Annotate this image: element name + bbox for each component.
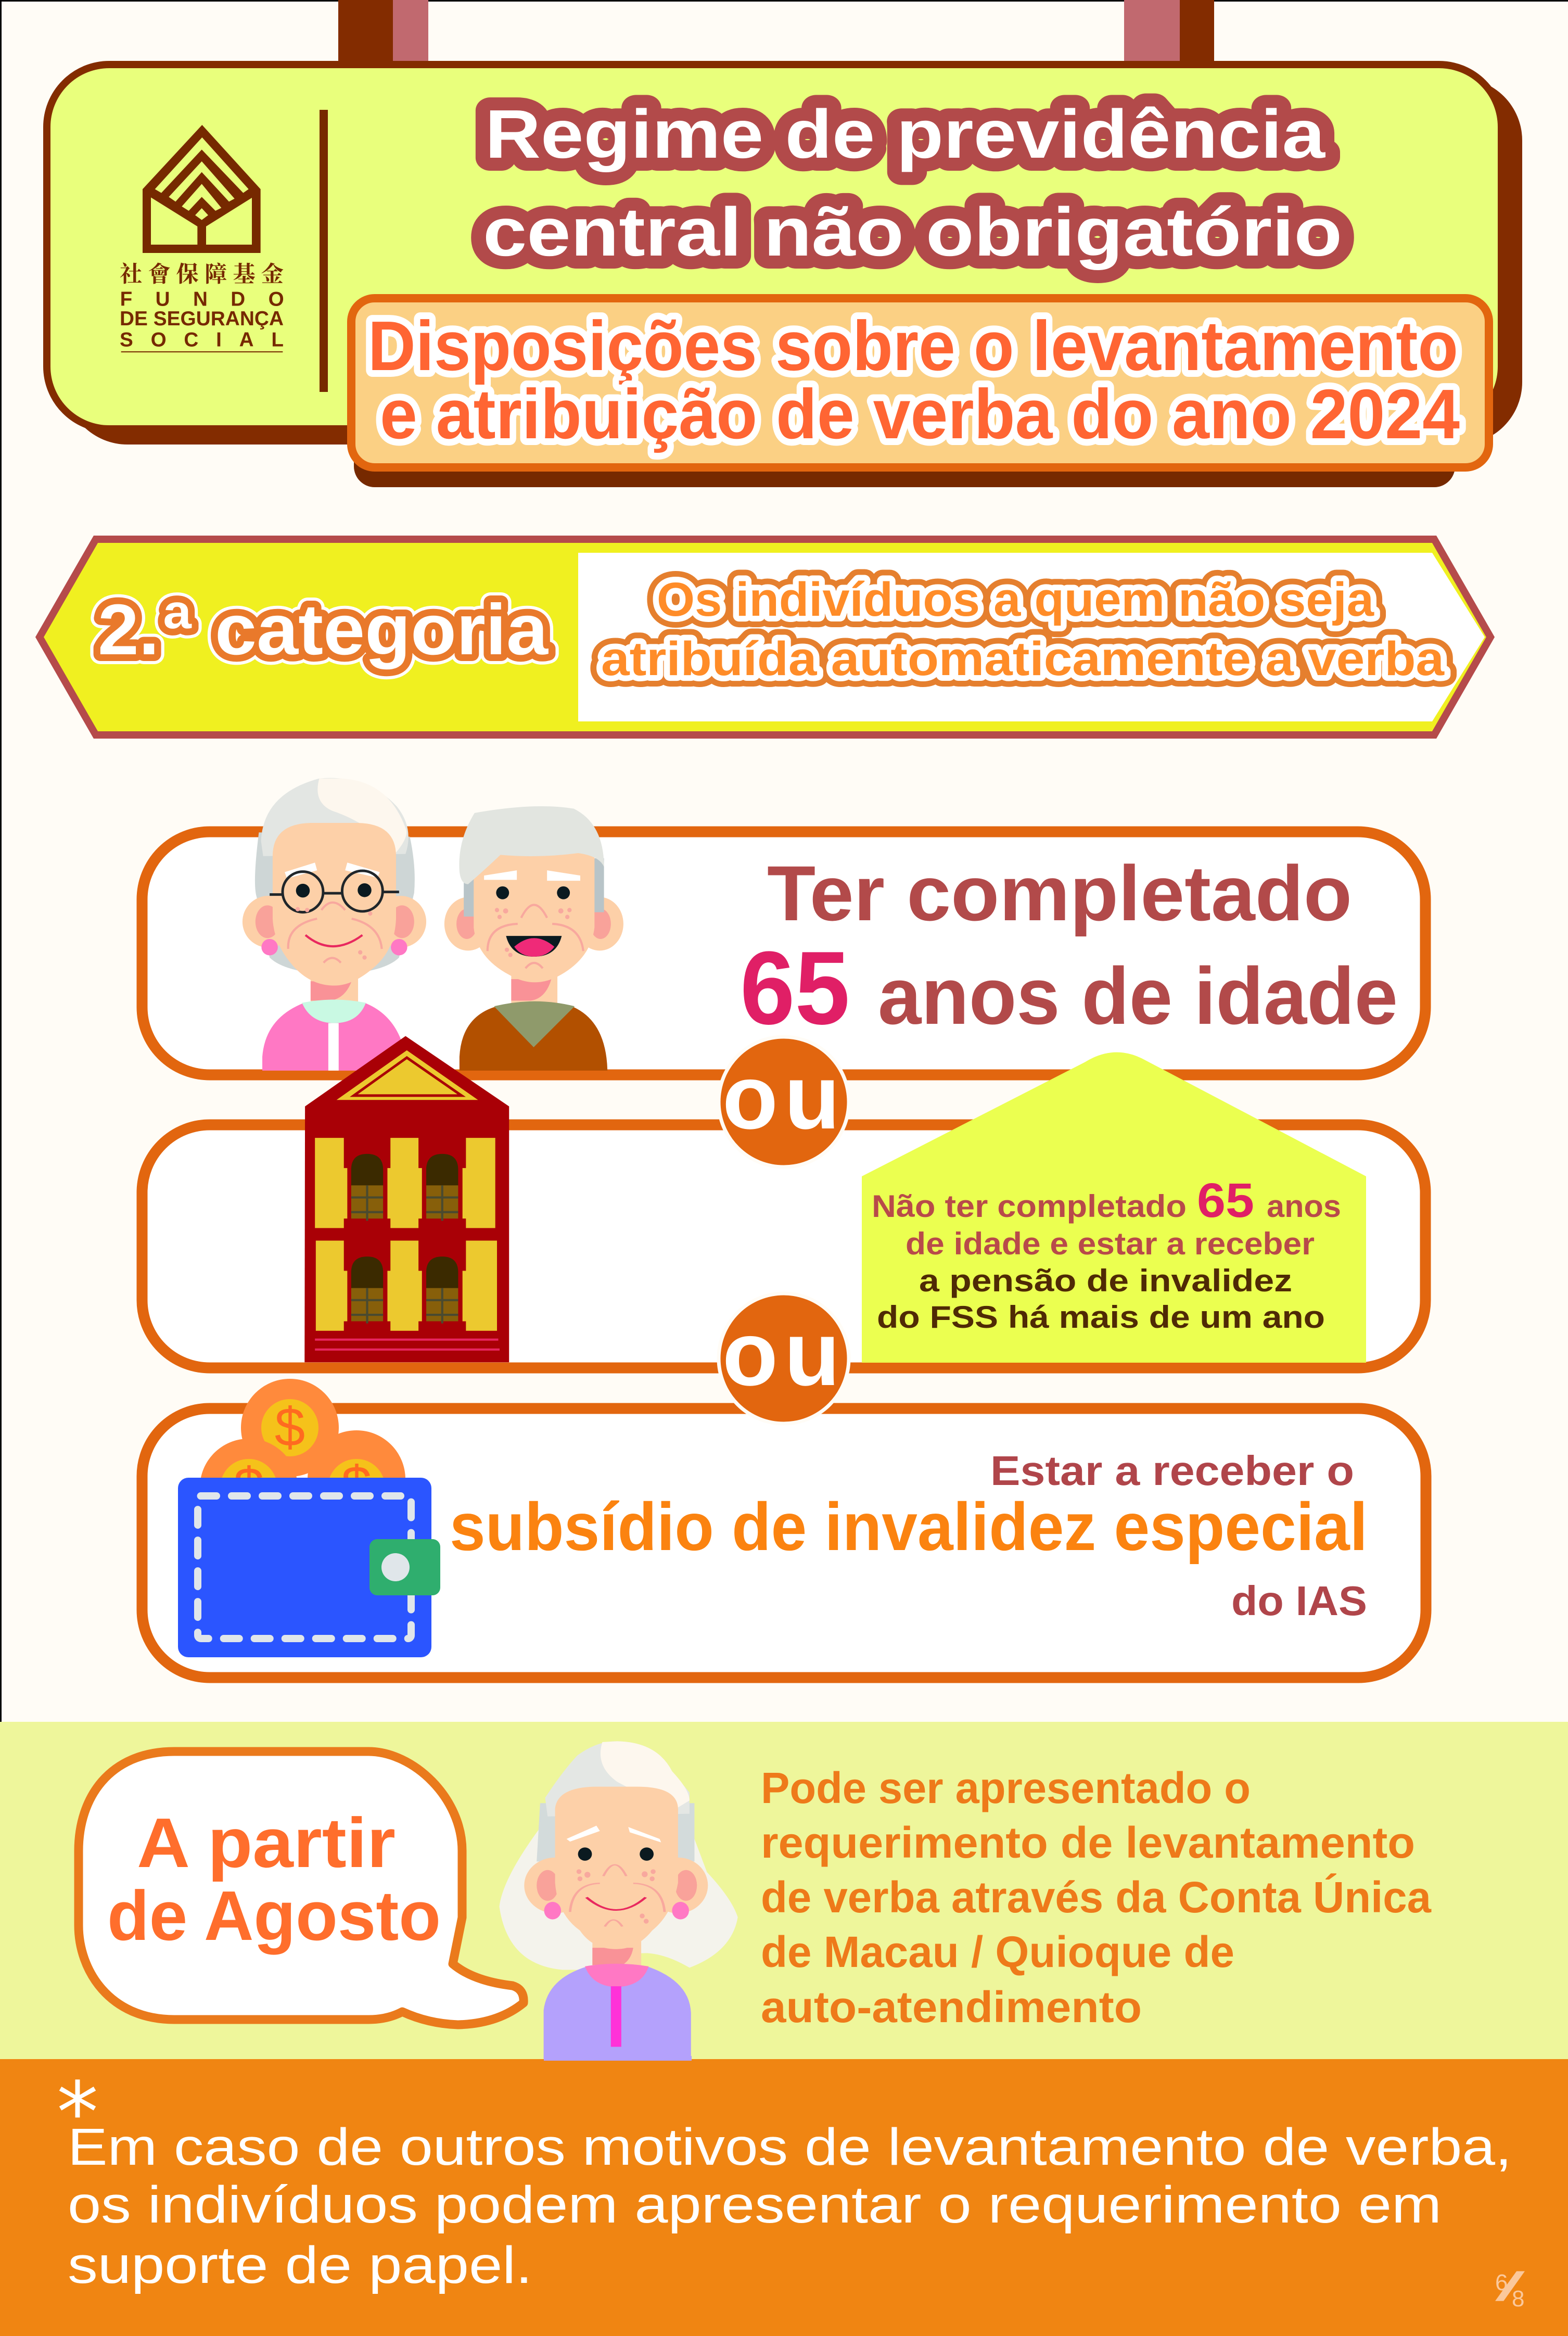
logo: Fundo de Segurança Social: SOCIAL xyxy=(120,329,284,351)
hanging strap left xyxy=(338,0,428,65)
text: subsídio de invalidez especial: subsídio de invalidez especial xyxy=(450,1489,1368,1565)
panel: box pension xyxy=(142,1125,1425,1368)
subtitle panel xyxy=(351,298,1489,487)
badge: ou (second): ou xyxy=(722,1303,840,1405)
heading: 2.ª categoria: ª xyxy=(163,586,192,673)
logo: Fundo de Segurança Social: 社會保障基金 xyxy=(120,262,284,287)
text: application instructions xyxy=(761,1763,1432,2032)
text: application instructions: de verba através da Conta Única xyxy=(761,1873,1432,1922)
callout text: de idade e estar a receber xyxy=(906,1226,1315,1261)
icon: elderly woman with glasses xyxy=(243,778,426,1071)
callout text: do FSS há mais de um ano xyxy=(877,1300,1325,1335)
heading: 2.ª categoria: 2. xyxy=(98,590,159,670)
callout text: 65 xyxy=(1197,1173,1254,1227)
page number: / xyxy=(1495,2264,1525,2309)
subtitle panel: e atribuição de verba do ano 2024 xyxy=(380,375,1460,453)
panel: pension callout xyxy=(862,1052,1366,1363)
text: application instructions: auto-atendimento xyxy=(761,1983,1142,2032)
panel: box age 65 xyxy=(142,832,1425,1075)
category description: atribuída automaticamente a verba xyxy=(601,632,1445,685)
text: Ter completado 65 anos de idade: anos de idade xyxy=(878,951,1398,1041)
logo: Fundo de Segurança Social xyxy=(120,125,284,352)
speech bubble: de Agosto xyxy=(107,1876,441,1955)
category description xyxy=(601,573,1445,685)
footnote text: suporte de papel. xyxy=(68,2236,532,2294)
icon: coins: $ xyxy=(234,1457,264,1518)
panel: header xyxy=(47,65,1522,487)
callout text: a pensão de invalidez xyxy=(919,1263,1292,1298)
callout text xyxy=(872,1173,1341,1335)
icon: coins: $ xyxy=(341,1455,372,1516)
logo: Fundo de Segurança Social: FUNDO xyxy=(120,288,284,310)
asterisk: * xyxy=(57,2064,98,2161)
page number: 8 xyxy=(1512,2286,1524,2312)
title: Regime de previdência xyxy=(485,96,1326,172)
footnote text: os indivíduos podem apresentar o requerimento em xyxy=(68,2176,1442,2234)
icon: elderly woman speaking xyxy=(499,1741,738,2061)
logo: Fundo de Segurança Social: DE SEGURANÇA xyxy=(120,308,284,330)
title xyxy=(483,96,1342,270)
icon: elderly man smiling xyxy=(444,806,623,1071)
icon: Macau building xyxy=(304,1036,509,1362)
panel: box special subsidy xyxy=(142,1408,1426,1678)
speech bubble xyxy=(79,1751,524,2025)
category description: Os indivíduos a quem não seja xyxy=(657,573,1374,626)
text: application instructions: de Macau / Quioque de xyxy=(761,1927,1234,1976)
heading: 2.ª categoria: categoria xyxy=(215,590,549,670)
panel: application band xyxy=(0,1722,1568,2059)
heading: 2.ª categoria: 2. xyxy=(98,590,159,670)
icon: coins xyxy=(200,1379,405,1537)
footnote text xyxy=(68,2118,1512,2294)
text: subsídio de invalidez especial: do IAS xyxy=(1231,1578,1367,1624)
panel: footnote xyxy=(0,2056,1568,2336)
title: central não obrigatório xyxy=(483,194,1342,270)
text: Ter completado 65 anos de idade xyxy=(740,849,1398,1046)
text: Ter completado 65 anos de idade: 65 xyxy=(740,930,850,1046)
subtitle panel: Disposições sobre o levantamento xyxy=(368,307,1458,385)
speech bubble: A partir xyxy=(137,1804,396,1882)
badge: ou (first): ou xyxy=(722,1047,840,1148)
text: application instructions: Pode ser apresentado o xyxy=(761,1763,1251,1812)
heading: 2.ª categoria: categoria xyxy=(215,590,549,670)
hanging strap right xyxy=(1124,0,1214,65)
text: subsídio de invalidez especial xyxy=(450,1448,1368,1624)
icon: wallet xyxy=(178,1478,440,1657)
text: subsídio de invalidez especial: Estar a receber o xyxy=(990,1448,1354,1494)
text: application instructions: requerimento de levantamento xyxy=(761,1818,1415,1867)
panel: category banner xyxy=(40,539,1490,735)
icon: coins: $ xyxy=(275,1397,305,1458)
heading: 2.ª categoria: ª xyxy=(163,586,192,673)
footnote text: Em caso de outros motivos de levantamento de verba, xyxy=(68,2118,1512,2176)
category description: Os indivíduos a quem não seja xyxy=(657,573,1374,626)
text: Ter completado 65 anos de idade: Ter completado xyxy=(767,849,1352,937)
callout text: anos xyxy=(1267,1189,1341,1224)
page number xyxy=(1495,2264,1525,2312)
page number: 6 xyxy=(1495,2270,1508,2295)
category description: atribuída automaticamente a verba xyxy=(601,632,1445,685)
heading: 2.ª categoria xyxy=(98,586,549,673)
callout text: Não ter completado xyxy=(872,1189,1187,1224)
